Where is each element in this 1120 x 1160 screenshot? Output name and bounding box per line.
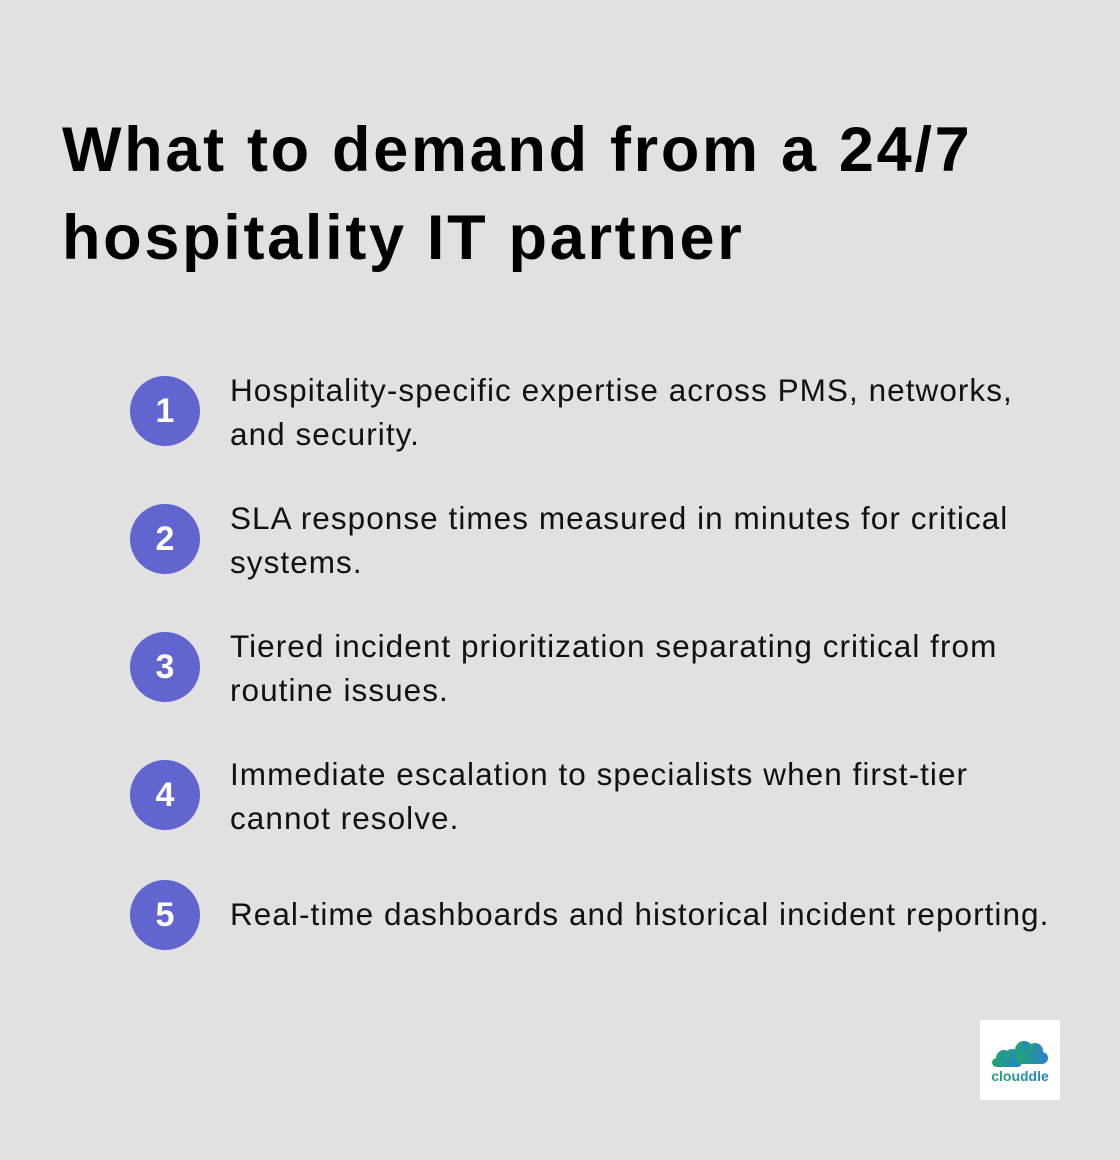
number 5: 5 (156, 896, 174, 934)
logo: clouddle: clouddle (991, 1068, 1049, 1084)
text 1: and security. (230, 416, 420, 452)
number 2 (130, 504, 200, 574)
title (62, 115, 972, 273)
logo: clouddle (980, 1020, 1060, 1100)
title: hospitality IT partner (62, 203, 744, 273)
number 1: 1 (156, 392, 174, 430)
text 3: Tiered incident prioritization separating critical from (230, 628, 997, 664)
text 1: Hospitality-specific expertise across PMS, networks, (230, 372, 1013, 408)
text 3: routine issues. (230, 672, 449, 708)
text 4: Immediate escalation to specialists when first-tier (230, 756, 968, 792)
number 5 (130, 880, 200, 950)
text 2: SLA response times measured in minutes for critical (230, 500, 1008, 536)
number 4 (130, 760, 200, 830)
text 2: systems. (230, 544, 363, 580)
number 3: 3 (156, 648, 174, 686)
number 3 (130, 632, 200, 702)
text 4: cannot resolve. (230, 800, 459, 836)
item 4 (130, 756, 968, 836)
text 2 (230, 500, 1008, 580)
number 4: 4 (156, 776, 174, 814)
number 1 (130, 376, 200, 446)
text 5: Real-time dashboards and historical incident reporting. (230, 896, 1049, 932)
text 3 (230, 628, 997, 708)
title: What to demand from a 24/7 (62, 115, 972, 185)
text 1 (230, 372, 1013, 452)
item 2 (130, 500, 1008, 580)
number 2: 2 (156, 520, 174, 558)
item 3 (130, 628, 997, 708)
text 4 (230, 756, 968, 836)
item 1 (130, 372, 1013, 452)
item 5 (130, 880, 1049, 950)
